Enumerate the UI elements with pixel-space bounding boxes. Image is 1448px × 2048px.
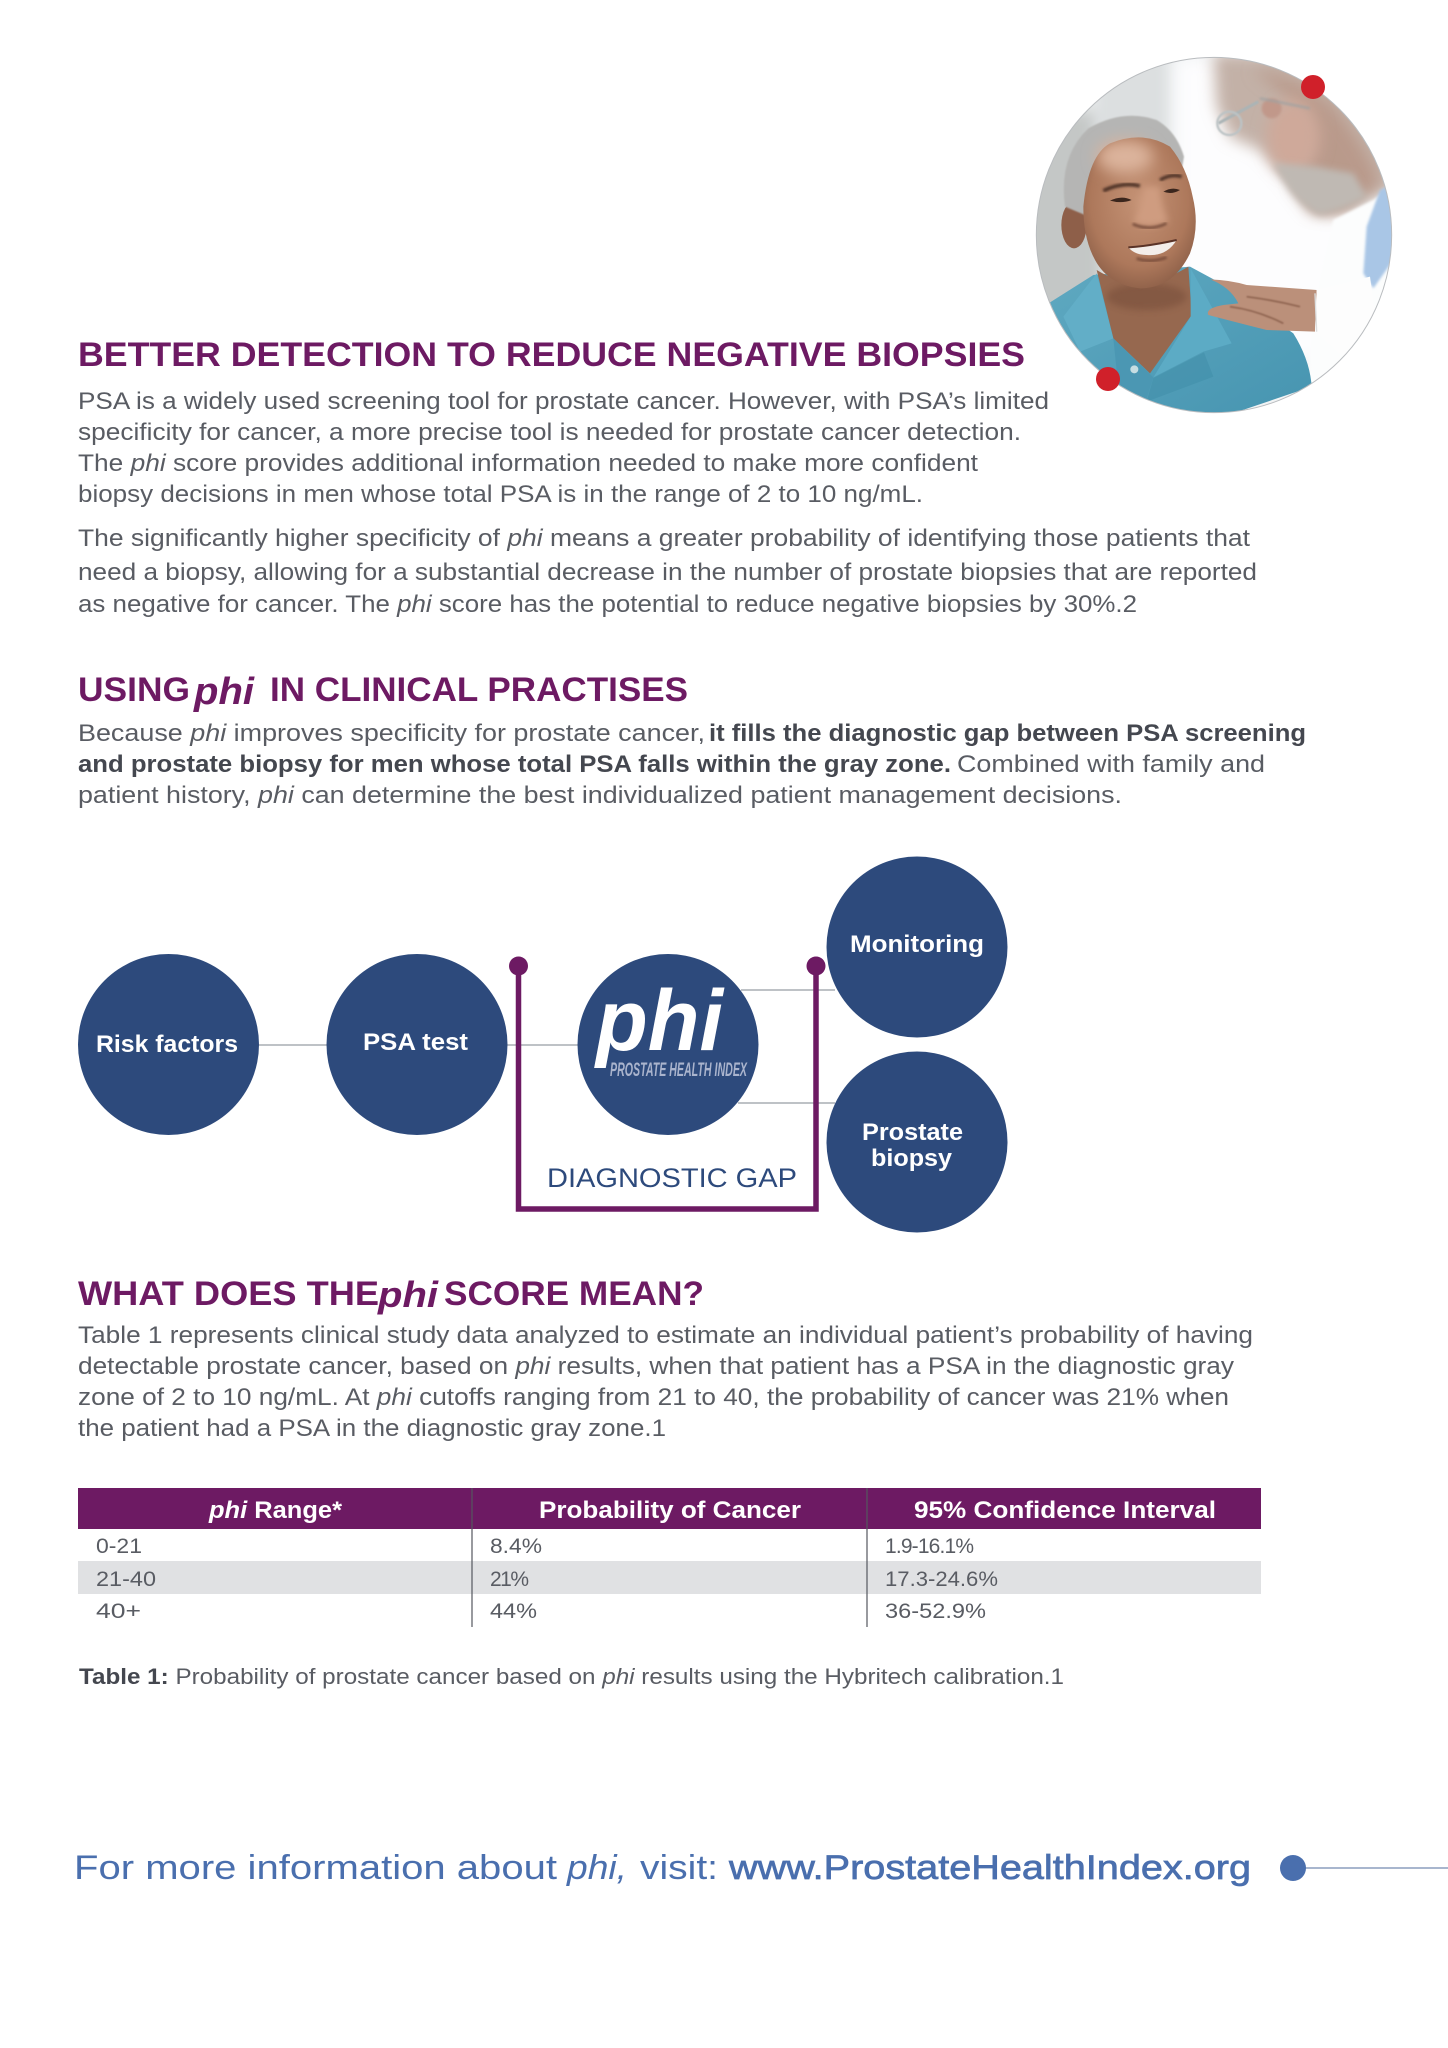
node: monitoring: Monitoring (850, 931, 984, 958)
node: risk factors: Risk factors (96, 1031, 238, 1058)
column rules (472, 1488, 867, 1627)
node: monitoring (826, 856, 1008, 1038)
heading: what does the phi score mean: SCORE MEAN? (444, 1275, 704, 1313)
node: prostate biopsy: biopsy (871, 1145, 953, 1172)
row 21-40: 21-40 (96, 1568, 156, 1591)
text block: diagnostic gap explanation (78, 720, 1306, 809)
node: phi logo: PROSTATE HEALTH INDEX (610, 1060, 748, 1081)
node: phi logo (578, 954, 758, 1135)
red dot top (1301, 75, 1325, 99)
diagnostic gap bracket (509, 956, 826, 1209)
row 0-21: 8.4% (490, 1535, 542, 1558)
heading: using phi: IN CLINICAL PRACTISES (270, 671, 688, 709)
heading: what does the phi score mean: phi (377, 1274, 439, 1315)
text block: specificity: need a biopsy, allowing for a substantial decrease in the number of prostate biopsies that are reported (78, 559, 1257, 586)
node: PSA test: PSA test (363, 1029, 468, 1056)
photo: doctor with patient (1020, 53, 1397, 420)
heading: what does the phi score mean: WHAT DOES THE (78, 1275, 379, 1313)
neck (1097, 267, 1192, 373)
face (1083, 137, 1196, 288)
heading: what does the phi score mean (78, 1274, 704, 1315)
text block: PSA intro: The phi score provides additional information needed to make more confident (78, 450, 978, 477)
heading: using phi (78, 671, 688, 713)
text block: table intro: Table 1 represents clinical study data analyzed to estimate an individual patient’s probability of having (78, 1322, 1253, 1349)
hair (1064, 116, 1184, 215)
node: PSA test (326, 954, 508, 1135)
node: phi logo: phi (594, 973, 725, 1069)
row stripe (78, 1561, 1261, 1594)
footer link: www.ProstateHealthIndex.org (728, 1849, 1251, 1887)
text block: table intro: the patient had a PSA in the diagnostic gray zone.1 (78, 1415, 666, 1442)
row 40+: 36-52.9% (885, 1600, 986, 1623)
row 21-40: 17.3-24.6% (885, 1568, 998, 1591)
flow diagram (78, 856, 1008, 1232)
node: prostate biopsy (826, 1052, 1008, 1232)
footer link: visit: (640, 1849, 718, 1887)
table caption: Table 1: Probability of prostate cancer based on phi results using the Hybritech calibration.1 (79, 1664, 1064, 1689)
text block: PSA intro: specificity for cancer, a more precise tool is needed for prostate cancer detection. (78, 419, 1021, 446)
node: risk factors (78, 954, 259, 1135)
row 21-40 (96, 1568, 998, 1591)
text block: specificity (78, 525, 1257, 618)
text block: table intro: detectable prostate cancer, based on phi results, when that patient has a PSA in the diagnostic gray (78, 1353, 1235, 1380)
text block: table intro (78, 1322, 1253, 1442)
row 40+ (96, 1600, 986, 1623)
table: probability of cancer (78, 1488, 1261, 1627)
text block: PSA intro: biopsy decisions in men whose total PSA is in the range of 2 to 10 ng/mL. (78, 481, 923, 508)
connector lines (255, 990, 835, 1103)
heading: using phi: USING (78, 671, 190, 709)
red dot bottom (1096, 367, 1120, 391)
text block: diagnostic gap explanation: Because phi improves specificity for prostate cancer, (78, 720, 705, 747)
label: diagnostic gap: DIAGNOSTIC GAP (547, 1163, 797, 1193)
text block: diagnostic gap explanation: and prostate biopsy for men whose total PSA falls within the gray zone. (78, 751, 951, 778)
text block: table intro: zone of 2 to 10 ng/mL. At phi cutoffs ranging from 21 to 40, the probability of cancer was 21% when (78, 1384, 1229, 1411)
text block: specificity: The significantly higher specificity of phi means a greater probability of identifying those patients that (78, 525, 1250, 552)
node: prostate biopsy: Prostate (862, 1119, 963, 1146)
text block: diagnostic gap explanation: it fills the diagnostic gap between PSA screening (709, 720, 1306, 747)
collars (1153, 268, 1232, 377)
footer link: phi, (566, 1849, 627, 1887)
row 0-21: 1.9-16.1% (885, 1535, 974, 1558)
text block: specificity: as negative for cancer. The phi score has the potential to reduce negative biopsies by 30%.2 (78, 591, 1137, 618)
row 0-21: 0-21 (96, 1535, 142, 1558)
text block: PSA intro (78, 388, 1049, 508)
text block: diagnostic gap explanation: Combined with family and (957, 751, 1265, 778)
table header: Probability of Cancer (539, 1497, 801, 1524)
row 0-21 (96, 1535, 974, 1558)
hand (1208, 279, 1317, 332)
footer dot and rule (1280, 1855, 1448, 1881)
row 40+: 44% (490, 1600, 537, 1623)
row 21-40: 21% (490, 1568, 529, 1591)
heading: using phi: phi (193, 671, 256, 713)
table header: 95% Confidence Interval (914, 1497, 1216, 1524)
row 40+: 40+ (96, 1600, 141, 1623)
heading: better detection: BETTER DETECTION TO REDUCE NEGATIVE BIOPSIES (78, 336, 1025, 374)
table header (78, 1488, 1261, 1529)
table header: phi Range* (208, 1497, 343, 1524)
text block: PSA intro: PSA is a widely used screening tool for prostate cancer. However, with PSA’s limited (78, 388, 1049, 415)
footer link (74, 1849, 1251, 1887)
ear (1061, 206, 1086, 248)
text block: diagnostic gap explanation: patient history, phi can determine the best individualized patient management decisions. (78, 782, 1122, 809)
shirt (1043, 267, 1312, 420)
footer link: For more information about (74, 1849, 558, 1887)
